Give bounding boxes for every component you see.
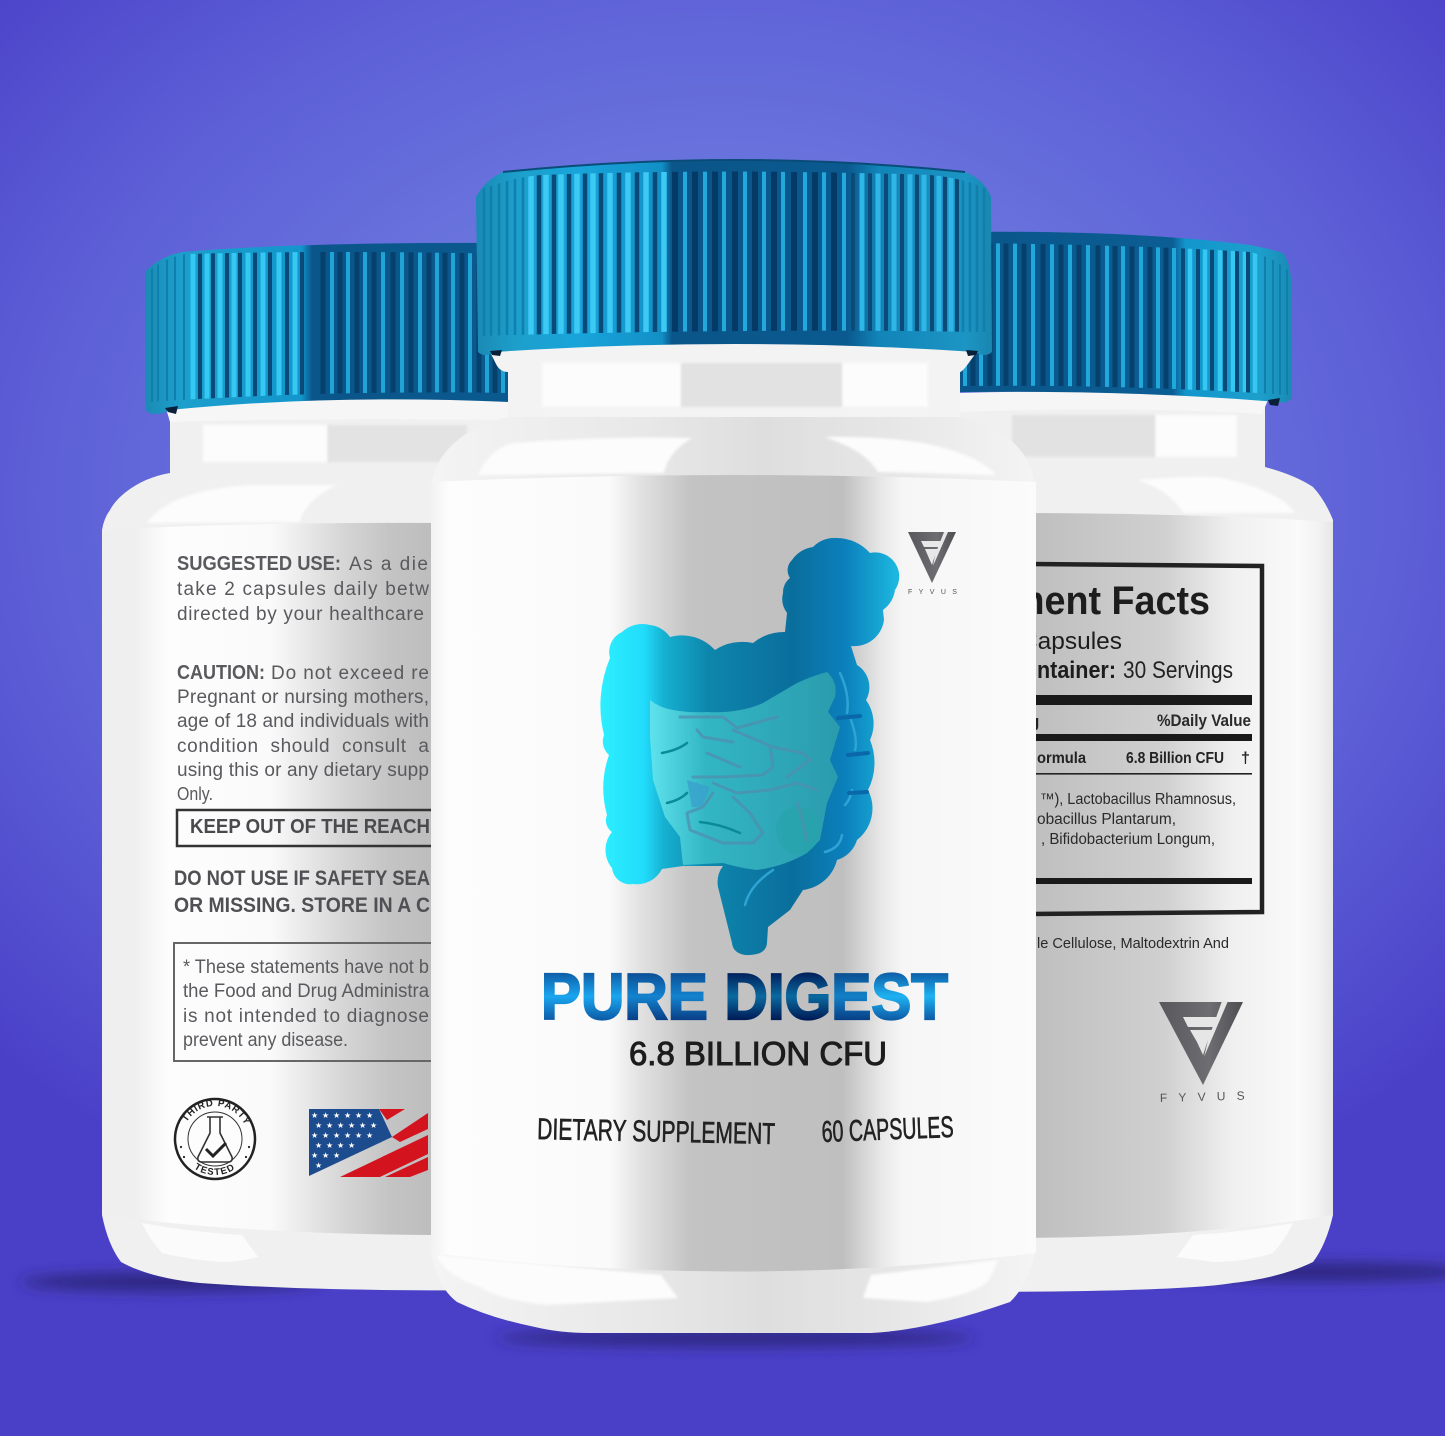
left bottle directions text: SUGGESTED USE:	[177, 553, 341, 575]
FDA disclaimer box: is not intended to diagnose	[183, 1006, 429, 1027]
center bottle cap	[476, 160, 992, 356]
intestine illustration	[600, 538, 899, 955]
intestine folds	[680, 717, 817, 843]
american flag: ★	[311, 1151, 318, 1160]
keep out of reach box: KEEP OUT OF THE REACH	[190, 816, 430, 838]
left bottle directions text: take 2 capsules daily betw	[177, 579, 429, 600]
left bottle directions text: age of 18 and individuals with	[177, 711, 429, 732]
left bottle directions text	[177, 553, 429, 804]
left bottle label	[102, 523, 450, 1235]
third party tested seal: TESTED	[196, 1162, 234, 1175]
right bottle	[950, 232, 1333, 1292]
right bottle body	[950, 405, 1333, 1292]
american flag: ★	[315, 1141, 322, 1150]
left bottle directions text: Do not exceed re	[271, 663, 429, 684]
FYVUS logo large: FYVUS	[1160, 1088, 1256, 1105]
american flag: ★	[348, 1141, 355, 1150]
american flag: ★	[344, 1131, 351, 1140]
supplement facts panel: Capsules	[1020, 628, 1122, 655]
FDA disclaimer box	[174, 943, 474, 1061]
american flag: ★	[370, 1121, 377, 1130]
american flag: ★	[311, 1131, 318, 1140]
right bottle ring	[960, 392, 1268, 414]
intestine lobe	[776, 806, 820, 854]
capsule count: 60 CAPSULES	[821, 1111, 954, 1149]
american flag: ★	[333, 1131, 340, 1140]
supplement facts panel: obacillus Plantarum,	[1037, 811, 1176, 828]
left bottle cap	[145, 243, 510, 414]
american flag: ★	[326, 1121, 333, 1130]
FDA disclaimer box: prevent any disease.	[183, 1030, 348, 1051]
FYVUS logo small: FYVUS	[908, 589, 963, 596]
floor shadows	[20, 1263, 1445, 1346]
american flag: ★	[333, 1111, 340, 1120]
supplement facts panel: 6.8 Billion CFU	[1126, 750, 1224, 767]
american flag: ★	[315, 1161, 322, 1170]
product name: PURE DIGEST	[541, 960, 948, 1033]
supplement facts panel: %Daily Value	[1157, 711, 1251, 730]
american flag: ★	[344, 1111, 351, 1120]
supplement facts panel: g	[1029, 712, 1039, 731]
dietary supplement: DIETARY SUPPLEMENT	[537, 1113, 775, 1151]
FDA disclaimer box: the Food and Drug Administra	[183, 981, 429, 1002]
american flag: ★	[326, 1141, 333, 1150]
third party tested seal	[174, 1098, 256, 1180]
supplement facts panel: †	[1241, 750, 1250, 767]
colon	[600, 538, 899, 955]
american flag	[309, 1109, 428, 1177]
potency line: 6.8 BILLION CFU	[629, 1035, 887, 1072]
center bottle neck and ring	[489, 342, 978, 418]
supplement facts panel: ™), Lactobacillus Rhamnosus,	[1040, 791, 1236, 808]
center bottle	[431, 160, 1036, 1333]
american flag: ★	[337, 1121, 344, 1130]
left bottle directions text: As a die	[349, 554, 429, 575]
third party tested seal: THIRD PARTY	[182, 1100, 250, 1123]
american flag: ★	[366, 1111, 373, 1120]
american flag: ★	[322, 1131, 329, 1140]
american flag: ★	[355, 1111, 362, 1120]
right bottle base highlight	[1177, 1223, 1293, 1262]
other ingredients: le Cellulose, Maltodextrin And	[1037, 935, 1229, 952]
center bottle label	[431, 475, 1036, 1272]
left bottle ring	[165, 398, 510, 422]
right bottle cap	[960, 232, 1292, 406]
shoulder highlights	[436, 437, 998, 1305]
left bottle neck shade	[327, 425, 467, 462]
supplement facts panel: ntainer:	[1037, 657, 1116, 684]
left bottle body	[102, 408, 520, 1290]
FYVUS logo small	[908, 532, 963, 596]
american flag: ★	[311, 1111, 318, 1120]
right bottle neck shade	[1012, 415, 1155, 457]
left bottle base highlight	[142, 1223, 258, 1262]
left bottle directions text: Pregnant or nursing mothers,	[177, 687, 429, 708]
supplement facts panel	[1011, 564, 1262, 914]
FYVUS logo large	[1159, 1001, 1256, 1105]
american flag: ★	[366, 1131, 373, 1140]
safety seal warning: OR MISSING. STORE IN A C	[174, 894, 430, 917]
american flag: ★	[322, 1151, 329, 1160]
supplement facts panel: 30 Servings	[1123, 657, 1233, 684]
left bottle directions text: using this or any dietary supp	[177, 760, 429, 781]
left bottle directions text: directed by your healthcare	[177, 604, 424, 625]
safety seal warning: DO NOT USE IF SAFETY SEA	[174, 867, 430, 890]
left bottle neck highlight	[147, 425, 337, 523]
right bottle neck highlight	[1137, 415, 1295, 513]
american flag: ★	[337, 1141, 344, 1150]
descending colon folds	[745, 673, 856, 905]
american flag: ★	[315, 1121, 322, 1130]
safety seal warning	[174, 867, 430, 917]
american flag: ★	[333, 1151, 340, 1160]
supplement facts panel: ormula	[1037, 750, 1086, 767]
small intestine	[650, 672, 840, 870]
FDA disclaimer box: * These statements have not b	[183, 957, 429, 978]
american flag: ★	[355, 1131, 362, 1140]
american flag: ★	[348, 1121, 355, 1130]
supplement facts panel: , Bifidobacterium Longum,	[1041, 831, 1215, 848]
right bottle label	[1000, 513, 1333, 1238]
supplement facts panel: ment Facts	[1011, 579, 1210, 623]
left bottle directions text: CAUTION:	[177, 662, 265, 684]
left bottle	[102, 242, 508, 1290]
left bottle directions text: Only.	[177, 784, 213, 804]
left bottle directions text: condition should consult a	[177, 736, 429, 757]
center bottle body	[431, 417, 1035, 1333]
american flag: ★	[359, 1121, 366, 1130]
keep out of reach box	[177, 810, 477, 846]
american flag: ★	[322, 1111, 329, 1120]
